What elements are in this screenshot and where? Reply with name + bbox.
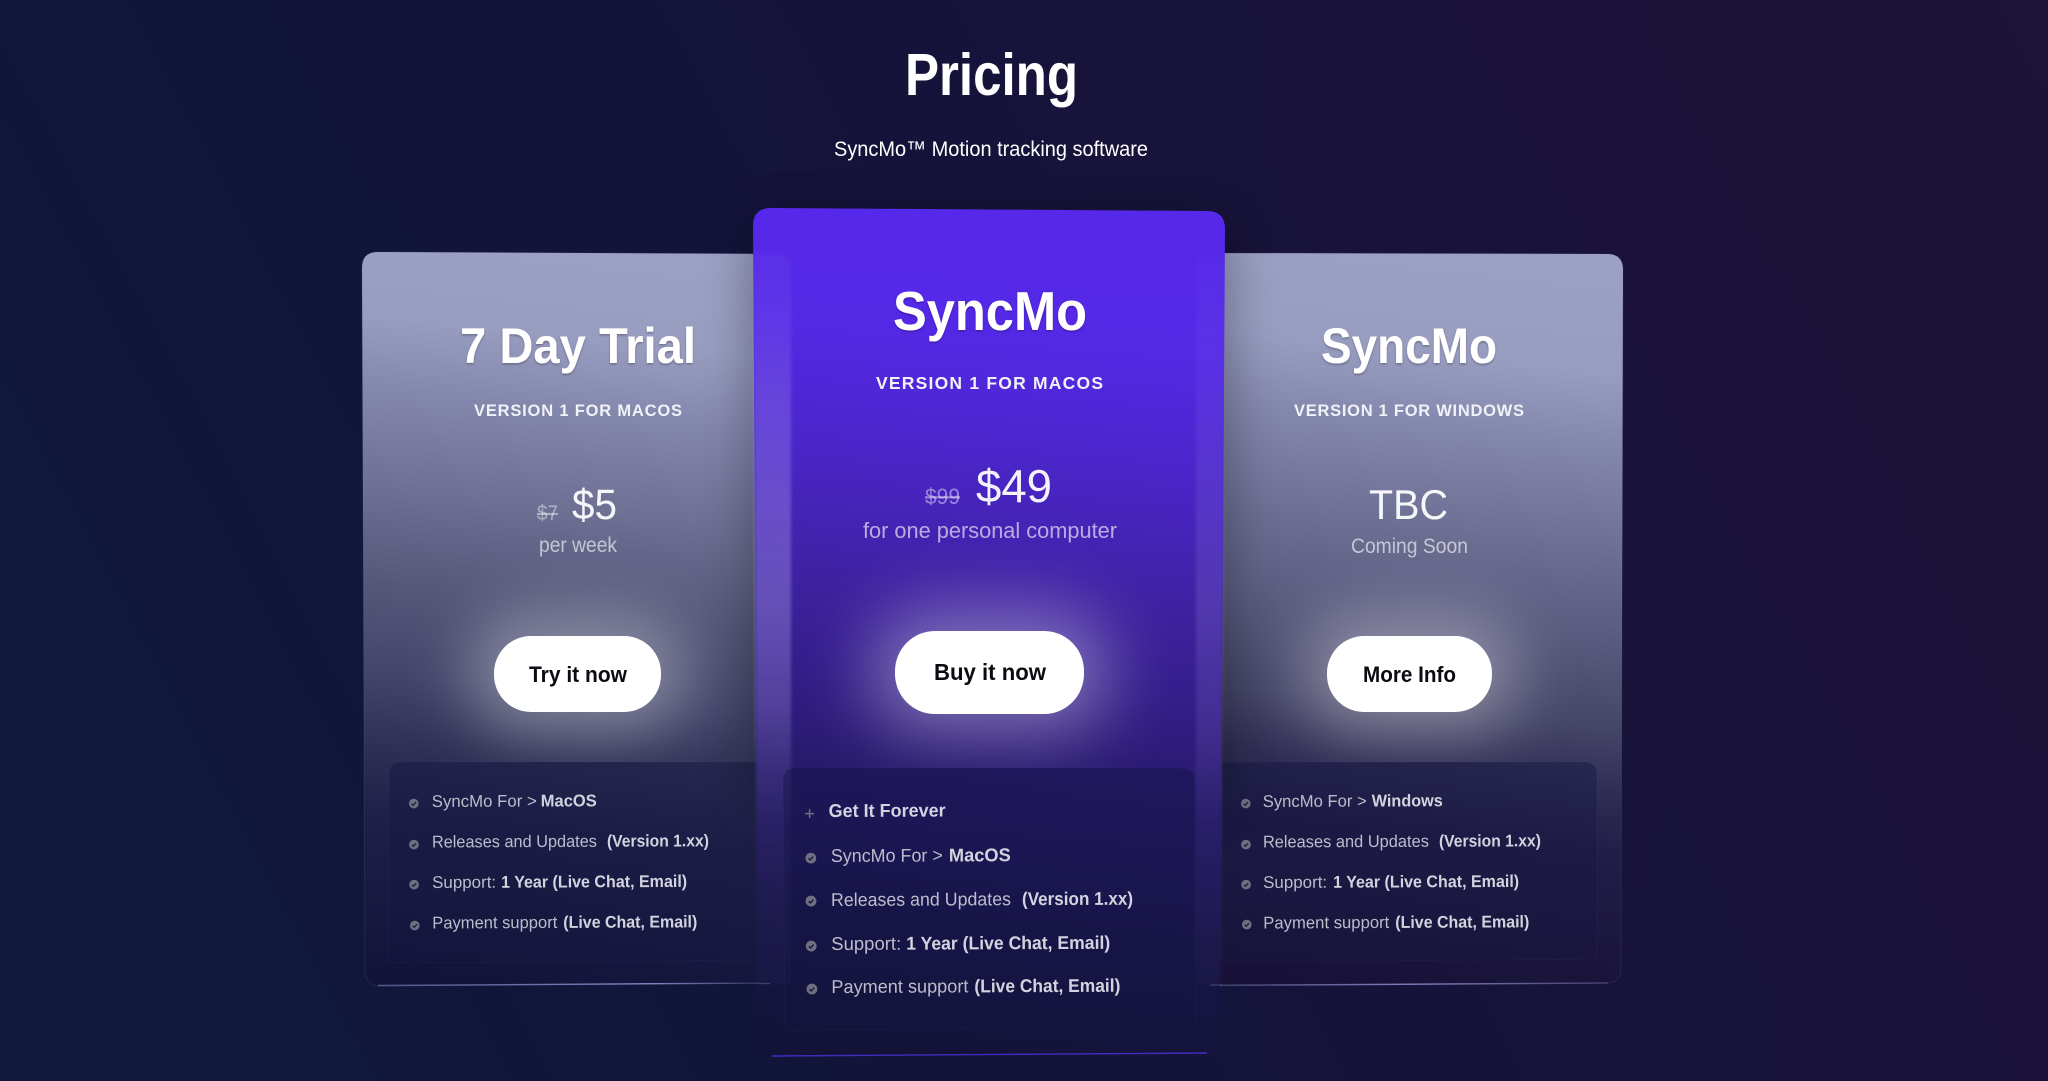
feature list xyxy=(805,799,1133,997)
feature row: MacOS xyxy=(541,791,597,811)
pricing infographic xyxy=(362,52,1624,1057)
feature row: (Live Chat, Email) xyxy=(563,912,697,932)
feature list panel xyxy=(1222,762,1597,962)
card background xyxy=(1195,253,1623,985)
button xyxy=(1327,636,1492,712)
price note: for one personal computer xyxy=(863,518,1117,543)
feature row: (Live Chat, Email) xyxy=(974,975,1120,996)
old price: $7 xyxy=(537,502,558,525)
price: $5 xyxy=(572,481,617,529)
version label: VERSION 1 FOR WINDOWS xyxy=(1294,402,1524,420)
feature row xyxy=(1241,831,1541,852)
card heading: SyncMo xyxy=(1321,318,1497,374)
center card shadow xyxy=(753,225,1225,800)
feature row xyxy=(1241,791,1443,811)
feature list panel xyxy=(389,762,765,963)
feature row xyxy=(1242,912,1529,933)
button xyxy=(494,636,661,712)
button xyxy=(895,631,1084,714)
feature row: 1 Year (Live Chat, Email) xyxy=(501,872,687,892)
button: More Info xyxy=(1363,662,1456,687)
button: Try it now xyxy=(529,662,628,687)
price placeholder: TBC xyxy=(1369,481,1448,528)
feature row xyxy=(409,872,687,892)
feature row xyxy=(806,975,1120,997)
feature row: SyncMo For > xyxy=(1263,792,1367,811)
right overlap band xyxy=(1196,254,1225,985)
feature row: Releases and Updates xyxy=(831,888,1011,910)
feature row: SyncMo For > xyxy=(432,792,537,811)
card bottom highlight xyxy=(772,1053,1207,1056)
bonus row: Get It Forever xyxy=(829,799,946,821)
button: Buy it now xyxy=(934,659,1046,685)
feature list xyxy=(409,791,709,933)
panel: 7 Day Trial card xyxy=(362,252,792,986)
feature row: (Version 1.xx) xyxy=(1022,888,1133,909)
feature row xyxy=(409,791,597,811)
old price: $99 xyxy=(925,484,960,509)
feature row xyxy=(806,888,1133,910)
feature row: Windows xyxy=(1372,791,1443,811)
feature row xyxy=(410,912,697,933)
feature row: (Version 1.xx) xyxy=(1439,831,1541,851)
feature row: Support: xyxy=(831,933,901,954)
version label: VERSION 1 FOR MACOS xyxy=(876,373,1103,393)
panel: SyncMo for macOS featured card xyxy=(753,208,1225,1057)
feature row xyxy=(806,932,1110,954)
feature row: Releases and Updates xyxy=(1263,832,1429,852)
feature row: Payment support xyxy=(432,913,558,932)
subtitle: SyncMo™ Motion tracking software xyxy=(834,137,1148,161)
feature row xyxy=(409,831,709,852)
feature row: SyncMo For > xyxy=(831,845,943,866)
price note: per week xyxy=(539,534,617,557)
title: Pricing xyxy=(905,42,1078,108)
card bottom highlight xyxy=(1210,983,1608,986)
card bottom highlight xyxy=(378,983,768,986)
feature list panel xyxy=(783,768,1195,1030)
feature row xyxy=(805,844,1011,866)
feature row: (Version 1.xx) xyxy=(607,831,709,851)
button glow xyxy=(1303,615,1516,735)
feature list xyxy=(1241,791,1541,933)
left overlap band xyxy=(753,253,791,985)
feature row: 1 Year (Live Chat, Email) xyxy=(1333,872,1519,892)
card heading: SyncMo xyxy=(893,280,1087,342)
card background xyxy=(753,208,1225,1057)
feature row: Payment support xyxy=(1263,913,1390,932)
feature row xyxy=(1241,872,1519,892)
button glow xyxy=(870,610,1109,735)
feature row: Payment support xyxy=(831,975,968,997)
feature row: Support: xyxy=(1263,873,1327,892)
side card bottom lines xyxy=(757,984,1222,985)
price note: Coming Soon xyxy=(1351,535,1468,558)
feature row: (Live Chat, Email) xyxy=(1395,912,1529,932)
price: $49 xyxy=(976,460,1052,512)
feature row: 1 Year (Live Chat, Email) xyxy=(906,932,1110,954)
button glow xyxy=(470,615,685,735)
card background xyxy=(362,252,792,986)
version label: VERSION 1 FOR MACOS xyxy=(474,402,682,420)
panel: SyncMo for Windows card xyxy=(1195,253,1623,986)
feature row: MacOS xyxy=(949,844,1011,865)
feature row: Support: xyxy=(432,873,496,892)
card heading: 7 Day Trial xyxy=(460,318,696,374)
feature row: Releases and Updates xyxy=(432,832,597,852)
